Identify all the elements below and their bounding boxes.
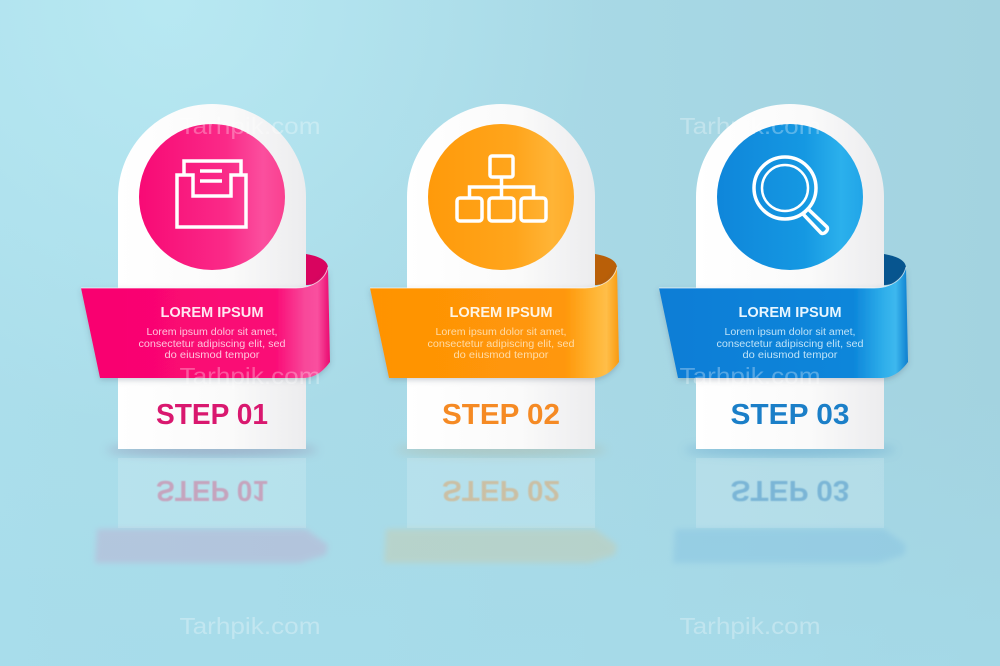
ribbon reflection xyxy=(95,529,328,563)
ribbon body: Lorem ipsum dolor sit amet, xyxy=(724,327,856,338)
icon: hierarchy xyxy=(457,156,546,221)
icon: inbox tray xyxy=(177,161,246,227)
step label: STEP 01 xyxy=(156,399,268,431)
watermarks: Tarhpik.com xyxy=(680,113,820,139)
card reflection xyxy=(407,458,595,528)
ribbon reflection xyxy=(384,529,617,563)
card reflection: STEP 01 xyxy=(156,474,268,506)
card xyxy=(696,104,884,449)
ribbon body: do eiusmod tempor xyxy=(164,350,260,361)
watermarks: Tarhpik.com xyxy=(180,113,320,139)
card reflection xyxy=(118,458,306,528)
watermarks: Tarhpik.com xyxy=(180,613,320,639)
ribbon body: do eiusmod tempor xyxy=(454,350,549,361)
icon: magnifying glass xyxy=(754,157,827,233)
ribbon body: consectetur adipiscing elit, sed xyxy=(138,339,286,350)
ribbon reflection xyxy=(673,529,906,563)
card reflection: STEP 02 xyxy=(442,474,560,506)
step label: STEP 03 xyxy=(730,399,850,431)
ribbon heading: LOREM IPSUM xyxy=(738,305,842,321)
panel: step 01 xyxy=(81,104,330,563)
watermarks: Tarhpik.com xyxy=(680,613,820,639)
ribbon body: Lorem ipsum dolor sit amet, xyxy=(146,327,278,338)
card xyxy=(407,104,595,449)
card reflection xyxy=(696,458,884,528)
step label: STEP 02 xyxy=(442,399,560,431)
ribbon body xyxy=(138,327,286,361)
panel: step 03 xyxy=(659,104,908,563)
ribbon body xyxy=(428,327,574,361)
watermarks: Tarhpik.com xyxy=(680,363,820,389)
card reflection: STEP 03 xyxy=(730,474,850,506)
ribbon xyxy=(370,254,619,378)
card shadow xyxy=(395,444,607,456)
card xyxy=(118,104,306,449)
ribbon heading: LOREM IPSUM xyxy=(160,305,264,321)
watermarks: Tarhpik.com xyxy=(180,363,320,389)
card shadow xyxy=(684,444,896,456)
ribbon body: consectetur adipiscing elit, sed xyxy=(716,339,864,350)
panel: step 02 xyxy=(370,104,619,563)
ribbon body: do eiusmod tempor xyxy=(742,350,838,361)
ribbon xyxy=(81,254,330,378)
ribbon heading: LOREM IPSUM xyxy=(450,305,552,321)
icon circle xyxy=(139,124,285,270)
ribbon body: Lorem ipsum dolor sit amet, xyxy=(436,327,566,338)
icon circle xyxy=(428,124,574,270)
ribbon body: consectetur adipiscing elit, sed xyxy=(428,339,574,350)
card shadow xyxy=(106,444,318,456)
ribbon body xyxy=(716,327,864,361)
watermarks xyxy=(180,113,820,639)
ribbon xyxy=(659,254,908,378)
icon circle xyxy=(717,124,863,270)
